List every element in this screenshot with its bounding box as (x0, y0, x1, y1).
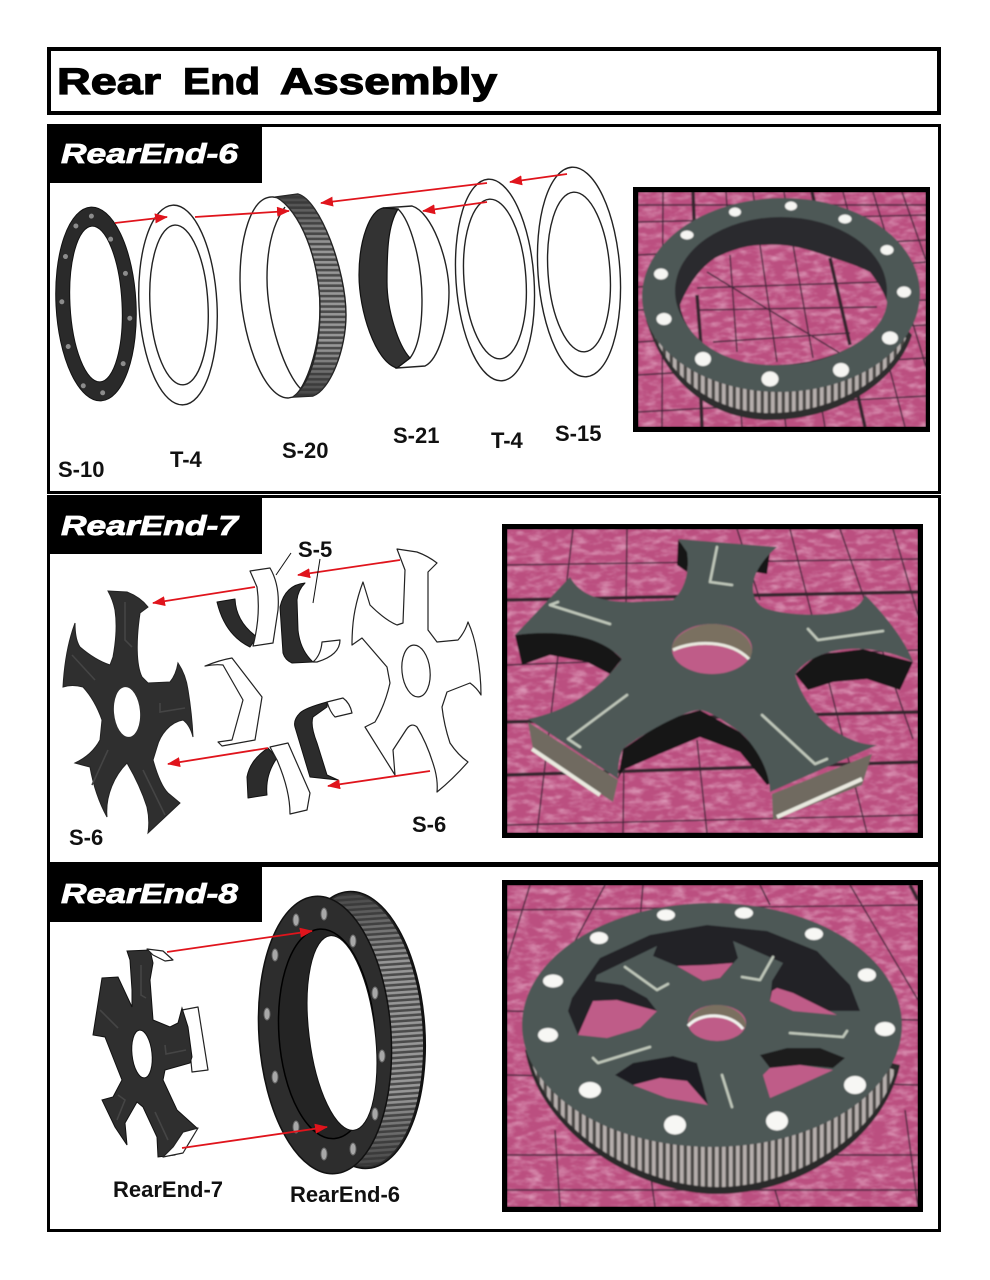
part labels: S-10 (58, 457, 104, 482)
part labels: S-6 (412, 812, 446, 837)
part labels: RearEnd-7 (113, 1177, 223, 1202)
part: S-6 outline (352, 549, 481, 792)
part labels: S-6 (69, 825, 103, 850)
part: T-4 left (134, 203, 222, 407)
part: S-20 (240, 194, 346, 398)
part labels: T-4 (491, 428, 524, 453)
photo: wheel hub (504, 526, 920, 836)
part: S-21 (359, 206, 449, 368)
title: End (183, 61, 260, 102)
title (49, 49, 939, 113)
panel: RearEnd-6 (47, 124, 940, 492)
arrows (115, 174, 567, 223)
part labels: S-15 (555, 421, 601, 446)
part labels: S-5 (298, 537, 332, 562)
part labels: S-20 (282, 438, 328, 463)
arrows (167, 931, 327, 1148)
part: RearEnd-7 wheel (93, 949, 208, 1157)
part labels: S-21 (393, 423, 439, 448)
heading: RearEnd-6 (47, 124, 262, 183)
part: S-6 dark (63, 591, 193, 833)
part: S-15 (531, 164, 627, 380)
photo: assembled ring (636, 190, 940, 430)
leader lines: S-5 (276, 553, 320, 603)
part labels (69, 537, 446, 850)
part labels: T-4 (170, 447, 203, 472)
heading: RearEnd-7: RearEnd-7 (61, 510, 240, 541)
part labels (113, 1177, 400, 1207)
part labels: RearEnd-6 (290, 1182, 400, 1207)
part: S-5 pieces (205, 568, 352, 814)
title: Rear (57, 61, 161, 102)
heading: RearEnd-6: RearEnd-6 (61, 138, 239, 169)
part: RearEnd-6 ring (249, 888, 433, 1178)
arrows (153, 560, 430, 786)
part labels (58, 421, 601, 482)
part: T-4 right (449, 177, 541, 383)
panel: RearEnd-7 (47, 496, 940, 864)
heading: RearEnd-8: RearEnd-8 (61, 878, 239, 909)
panel: RearEnd-8 (47, 865, 940, 1230)
title: Assembly (280, 61, 498, 102)
heading: RearEnd-7 (47, 497, 262, 554)
photo: completed wheel (504, 882, 920, 1210)
part: S-10 (51, 205, 141, 403)
heading: RearEnd-8 (47, 865, 262, 922)
